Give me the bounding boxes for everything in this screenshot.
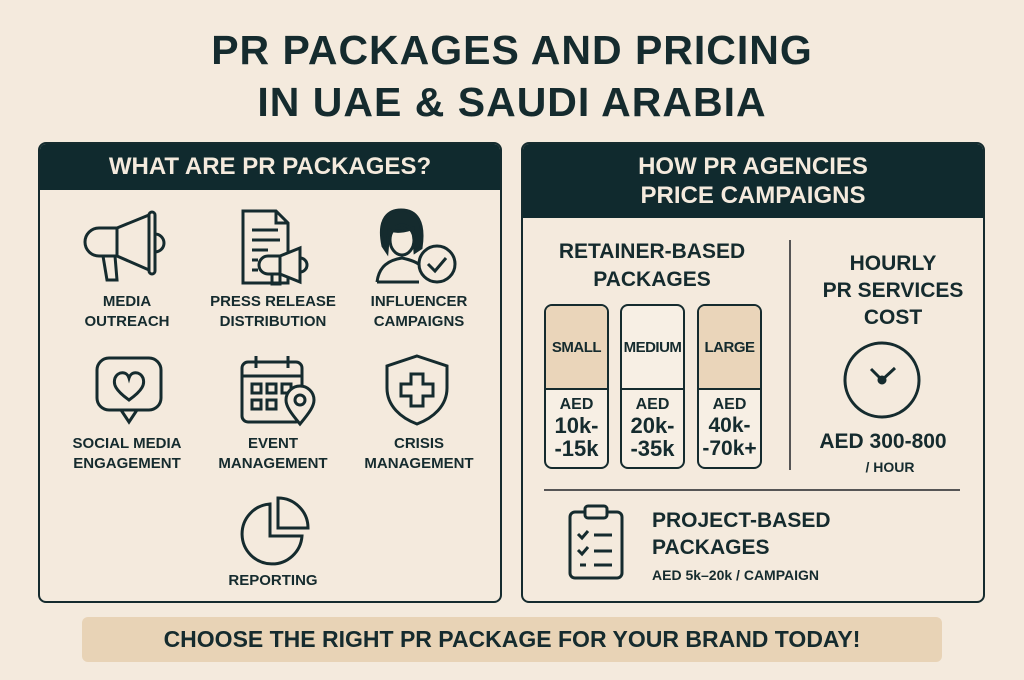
text: hourly price: AED 300-800 <box>819 430 947 453</box>
card: large: 40k- <box>708 414 751 437</box>
card: small <box>544 304 609 469</box>
label: press release distribution <box>210 293 336 330</box>
heading: how agencies price: HOW PR AGENCIES <box>638 153 868 180</box>
heading: retainer-based packages: PACKAGES <box>593 268 711 291</box>
heading: how agencies price: PRICE CAMPAIGNS <box>641 182 865 209</box>
icon: pie chart <box>240 496 310 566</box>
card: small: -15k <box>554 436 599 461</box>
card: large: -70k+ <box>702 437 757 460</box>
icon: clipboard <box>568 504 624 580</box>
card: large: AED <box>713 396 746 413</box>
label: social media engagement: SOCIAL MEDIA <box>73 435 181 452</box>
label: media outreach <box>84 293 170 330</box>
card: medium: -35k <box>630 436 675 461</box>
heading: retainer-based packages: RETAINER-BASED <box>559 240 745 263</box>
heading: hourly PR services cost: COST <box>864 306 922 329</box>
card: small: SMALL <box>552 338 601 356</box>
icon: clock <box>844 342 920 418</box>
banner: call to action <box>82 617 942 662</box>
icon: social heart bubble <box>96 356 162 425</box>
heading: how agencies price <box>523 144 983 218</box>
heading: retainer-based packages <box>559 240 745 291</box>
heading: project-based packages <box>652 509 831 559</box>
label: crisis management: CRISIS <box>394 435 444 452</box>
label: social media engagement: ENGAGEMENT <box>73 455 181 472</box>
icon: influencer <box>376 208 456 284</box>
panel: how PR agencies price campaigns <box>521 142 985 603</box>
label: influencer campaigns: CAMPAIGNS <box>374 313 464 330</box>
card: large: LARGE <box>704 338 754 356</box>
label: media outreach: OUTREACH <box>84 313 170 330</box>
panel: what are PR packages <box>38 142 502 603</box>
label: social media engagement <box>73 435 181 472</box>
title: IN UAE & SAUDI ARABIA <box>257 79 767 125</box>
label: influencer campaigns: INFLUENCER <box>371 293 467 310</box>
heading: what are PR packages: WHAT ARE PR PACKAGES? <box>109 153 431 180</box>
label: crisis management <box>364 435 474 472</box>
icon: shield cross <box>386 354 448 426</box>
heading: project-based packages: PROJECT-BASED <box>652 509 831 532</box>
card: small: 10k- <box>554 413 599 438</box>
text: per hour: / HOUR <box>866 459 914 475</box>
icon: calendar <box>240 356 316 426</box>
card: medium: 20k- <box>630 413 675 438</box>
card: large <box>697 304 762 469</box>
text: project price: AED 5k–20k / CAMPAIGN <box>652 567 819 583</box>
title <box>211 27 813 125</box>
label: media outreach: MEDIA <box>103 293 151 310</box>
card: medium <box>620 304 685 469</box>
heading: what are PR packages <box>40 144 500 190</box>
label: press release distribution: PRESS RELEASE <box>210 293 336 310</box>
label: event management: MANAGEMENT <box>218 455 328 472</box>
card: medium: AED <box>636 396 669 413</box>
title: PR PACKAGES AND PRICING <box>211 27 813 73</box>
label: influencer campaigns <box>371 293 467 330</box>
heading: hourly PR services cost: PR SERVICES <box>823 279 963 302</box>
label: crisis management: MANAGEMENT <box>364 455 474 472</box>
icon: press release <box>242 210 308 286</box>
icon: megaphone <box>84 210 166 282</box>
card: small: AED <box>560 396 593 413</box>
label: event management <box>218 435 328 472</box>
heading: hourly PR services cost <box>823 252 963 329</box>
heading: project-based packages: PACKAGES <box>652 536 769 559</box>
heading: hourly PR services cost: HOURLY <box>850 252 936 275</box>
label: event management: EVENT <box>248 435 298 452</box>
card: medium: MEDIUM <box>624 338 681 356</box>
label: press release distribution: DISTRIBUTION <box>220 313 326 330</box>
banner: call to action: CHOOSE THE RIGHT PR PACKAGE FOR YOUR BRAND TODAY! <box>164 626 860 652</box>
label: reporting: REPORTING <box>228 572 318 589</box>
